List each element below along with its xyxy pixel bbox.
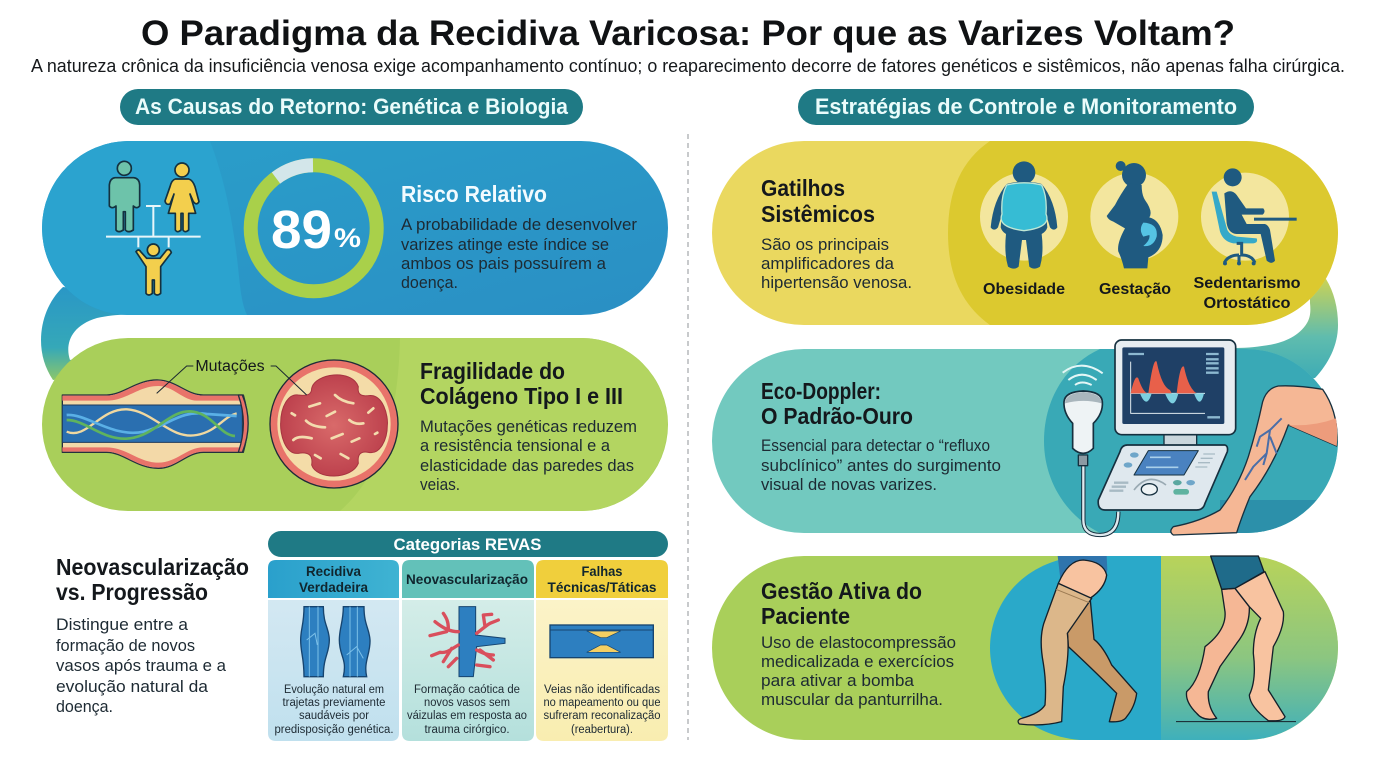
text: eco-doppler: Eco-Doppler: [761, 378, 881, 404]
icon: chaotic new vessels [430, 607, 505, 677]
column: falhas tecnicas: Técnicas/Táticas [548, 580, 656, 595]
text: eco-doppler [761, 378, 1001, 494]
text: fragilidade [420, 358, 637, 494]
connector: right S-curve [1225, 279, 1338, 385]
column: neovascularizacao: váizulas em resposta ao [407, 710, 527, 722]
text: gatilhos [761, 175, 912, 292]
text: fragilidade: veias. [420, 476, 460, 494]
text: fragilidade: a resistência tensional e a [420, 437, 611, 455]
title: O Paradigma da Recidiva Varicosa: Por que as Varizes Voltam? [141, 14, 1235, 53]
column: neovascularizacao: trauma cirórgico. [424, 724, 510, 736]
label: gestacao: Gestação [1099, 281, 1171, 298]
column: recidiva verdadeira: Recidiva [306, 564, 361, 579]
text: fragilidade: Fragilidade do [420, 358, 565, 384]
text: neovascularizacao vs progressao: formação de novos [56, 637, 195, 655]
column: recidiva verdadeira: saudáveis por [299, 710, 369, 722]
text: neovascularizacao vs progressao: evolução natural da [56, 678, 209, 696]
icon: true recurrence veins [301, 607, 370, 677]
text: neovascularizacao vs progressao [56, 554, 249, 716]
label: sedentarismo ortostatico [1194, 275, 1301, 312]
illustration: bare legs on tiptoe [1176, 556, 1296, 722]
column: recidiva verdadeira: Evolução natural em [284, 684, 384, 696]
icon: console [1098, 445, 1228, 510]
illustration: leg with compression stocking [1018, 556, 1137, 725]
icon: monitor [1115, 340, 1236, 447]
text: gestao ativa: medicalizada e exercícios [761, 653, 954, 671]
text: risco relativo: ambos os pais possuírem a [401, 255, 607, 273]
icon: obesidade [980, 161, 1068, 269]
illustration: vein with collagen fibres [62, 358, 398, 488]
column: recidiva verdadeira [268, 560, 399, 741]
chart: 89% ring: 89 [271, 200, 332, 260]
column: falhas tecnicas: no mapeamento ou que [544, 697, 660, 709]
text: neovascularizacao vs progressao: Distingue entre a [56, 616, 189, 634]
panel: eco-doppler [712, 340, 1340, 535]
text: gatilhos: Gatilhos [761, 175, 845, 201]
text: eco-doppler: subclínico” antes do surgimento [761, 457, 1001, 475]
table header [268, 531, 668, 557]
text: neovascularizacao vs progressao: Neovascularização [56, 554, 249, 580]
text: gestao ativa: Uso de elastocompressão [761, 634, 956, 652]
text: risco relativo [401, 181, 638, 292]
icon: family inheritance [106, 161, 201, 295]
column: recidiva verdadeira: predisposição genética. [274, 724, 394, 736]
label: sedentarismo ortostatico: Sedentarismo [1194, 275, 1301, 292]
text: gestao ativa: para ativar a bomba [761, 672, 915, 690]
icon: sedentarismo [1201, 168, 1297, 265]
table: categorias REVAS [268, 531, 668, 741]
chart: 89% ring [251, 165, 377, 291]
text: fragilidade: elasticidade das paredes das [420, 457, 634, 475]
text: gatilhos: hipertensão venosa. [761, 274, 912, 292]
text: gestao ativa [761, 578, 956, 709]
table header: Categorias REVAS [394, 535, 542, 554]
text: gestao ativa: muscular da panturrilha. [761, 691, 943, 709]
text: risco relativo: Risco Relativo [401, 181, 547, 207]
illustration: vein with collagen fibres: Mutações [195, 358, 265, 375]
text: risco relativo: varizes atinge este índice se [401, 236, 609, 254]
text: risco relativo: doença. [401, 274, 458, 292]
column: falhas tecnicas: sufreram reconalização [544, 710, 660, 722]
text: gestao ativa: Paciente [761, 603, 850, 629]
text: neovascularizacao vs progressao: vasos após trauma e a [56, 657, 227, 675]
column: falhas tecnicas: Veias não identificadas [544, 684, 660, 696]
column: recidiva verdadeira: Verdadeira [299, 580, 368, 595]
connector: left S-curve [41, 287, 165, 380]
column: neovascularizacao [402, 560, 534, 741]
heading: causes [120, 89, 583, 125]
panel: risco relativo [42, 141, 668, 315]
text: gatilhos: São os principais [761, 236, 889, 254]
subtitle: A natureza crônica da insuficiência venosa exige acompanhamento contínuo; o reaparecimento decorre de fatores genéticos e sistêmicos, não apenas falha cirúrgica. [31, 55, 1345, 76]
column: recidiva verdadeira: trajetas previamente [282, 697, 386, 709]
column: falhas tecnicas [536, 560, 668, 741]
text: risco relativo: A probabilidade de desenvolver [401, 216, 638, 234]
text: neovascularizacao vs progressao: doença. [56, 698, 113, 716]
text: gestao ativa: Gestão Ativa do [761, 578, 922, 604]
column: neovascularizacao: Neovascularização [406, 572, 528, 587]
icon: recanalized vein [550, 625, 653, 658]
text: gatilhos: Sistêmicos [761, 201, 875, 227]
illustration: ultrasound machine and leg [1063, 340, 1337, 535]
text: eco-doppler: O Padrão-Ouro [761, 403, 913, 429]
heading: strategies [798, 89, 1254, 125]
text: neovascularizacao vs progressao: vs. Progressão [56, 579, 208, 605]
icon: gestacao [1090, 161, 1178, 268]
column: neovascularizacao: Formação caótica de [414, 684, 520, 696]
label: obesidade: Obesidade [983, 281, 1065, 298]
heading: causes: As Causas do Retorno: Genética e Biologia [135, 94, 569, 119]
text: fragilidade: Mutações genéticas reduzem [420, 418, 637, 436]
column: neovascularizacao: novos vasos sem [424, 697, 510, 709]
chart: 89% ring: % [334, 223, 361, 253]
column: falhas tecnicas: (reabertura). [571, 724, 633, 736]
column: falhas tecnicas: Falhas [582, 564, 622, 579]
heading: strategies: Estratégias de Controle e Monitoramento [815, 94, 1237, 119]
text: fragilidade: Colágeno Tipo I e III [420, 383, 623, 409]
text: eco-doppler: Essencial para detectar o “refluxo [761, 437, 990, 455]
panel: fragilidade do colageno [42, 338, 668, 511]
panel: gatilhos sistemicos [712, 141, 1338, 325]
icon: probe and signal [1063, 366, 1118, 535]
icon: leg with varicose veins [1171, 386, 1337, 535]
panel: gestao ativa [712, 556, 1338, 740]
text: gatilhos: amplificadores da [761, 255, 895, 273]
text: eco-doppler: visual de novas varizes. [761, 476, 937, 494]
label: sedentarismo ortostatico: Ortostático [1204, 295, 1291, 312]
